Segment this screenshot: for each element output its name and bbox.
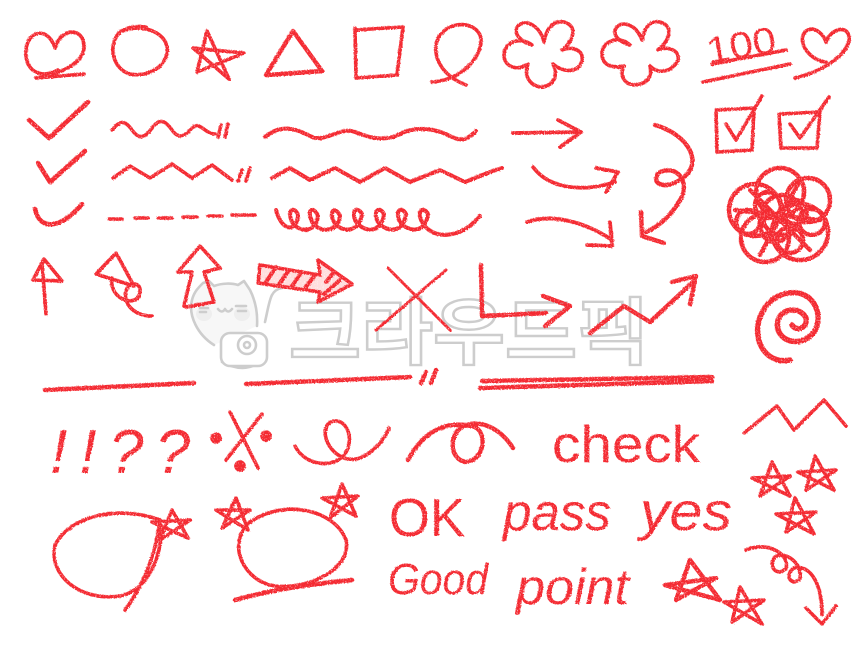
icon: L arrow xyxy=(481,265,570,326)
icon: zigzag xyxy=(744,400,846,433)
icon: flower 1 xyxy=(504,22,582,87)
icon: arrows xyxy=(513,120,618,246)
icon: scribble xyxy=(729,168,830,262)
icon: percent mark xyxy=(212,412,270,470)
icon: arrows up xyxy=(33,246,220,316)
watermark: cat with camera icon xyxy=(191,281,282,368)
icon: hatched arrow xyxy=(258,260,352,302)
icon: spiral xyxy=(758,293,818,361)
icon: three stars xyxy=(752,456,836,534)
text: 100: 100 xyxy=(703,19,779,72)
icon: curly arrow bottom right xyxy=(746,547,836,624)
icon: stars bottom xyxy=(665,560,764,624)
icon: loop xyxy=(432,25,481,85)
watermark: wordmark: 크라우드픽 xyxy=(289,274,649,380)
icon: curly down arrow xyxy=(641,125,692,243)
icon: double underline xyxy=(703,50,790,82)
icon: square xyxy=(355,27,403,78)
icon: ellipse with two stars xyxy=(216,484,358,600)
icon: long waves xyxy=(265,129,502,235)
icon: star xyxy=(193,31,244,79)
icon: checkboxes xyxy=(716,96,829,152)
text: pass: pass xyxy=(501,484,611,542)
icon: zigzag arrow xyxy=(590,276,696,333)
icon: flower 2 xyxy=(602,22,678,85)
icon: circle xyxy=(113,27,167,75)
text: check: check xyxy=(552,416,701,474)
text: point: point xyxy=(514,559,631,615)
icon: arc with loop xyxy=(408,424,513,462)
watermark xyxy=(191,274,649,380)
text: yes: yes xyxy=(636,482,732,542)
icon: ellipse with star xyxy=(54,510,190,610)
text: exclamation and question marks: !!?? xyxy=(50,418,191,487)
icon: cross xyxy=(376,268,450,330)
icon: heart small xyxy=(795,29,849,78)
icon: triangle xyxy=(266,31,322,75)
text: ok: OK xyxy=(389,488,465,548)
icon: heart xyxy=(26,32,84,78)
icon: curl xyxy=(295,421,389,464)
icon: short waves xyxy=(109,121,255,219)
icon: check marks xyxy=(29,102,88,224)
text: good: Good xyxy=(388,555,489,604)
underlines xyxy=(45,370,712,390)
